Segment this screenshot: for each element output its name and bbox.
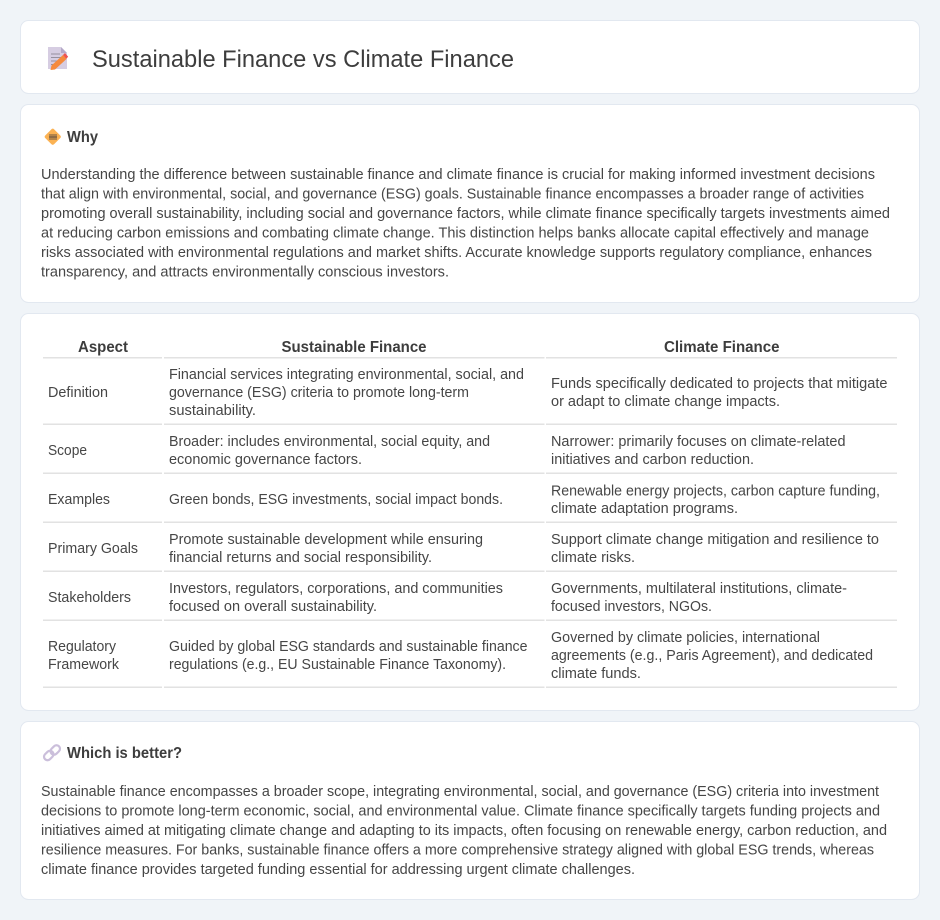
heading: why: Why (67, 129, 98, 146)
row: stakeholders: focused investors, NGOs. (551, 599, 712, 615)
title: Sustainable Finance vs Climate Finance (92, 46, 514, 73)
row: regulatory framework (48, 630, 873, 682)
row: regulatory framework: agreements (e.g., Paris Agreement), and dedicated (551, 648, 873, 664)
text block: which is better paragraph: decisions to promote long-term economic, social, and environmental value. Climate finance specifically targets funding projects and (41, 804, 880, 820)
row: regulatory framework: Guided by global ESG standards and sustainable finance (169, 639, 528, 655)
table header row: Sustainable Finance (282, 339, 427, 356)
text block: why paragraph: at reducing carbon emissions and combating climate change. This distinction helps banks allocate capital effectively and manage (41, 226, 869, 242)
row: definition (48, 367, 888, 419)
row: examples: Examples (48, 492, 110, 508)
row: scope: initiatives and carbon reduction. (551, 452, 754, 468)
row: definition: Definition (48, 385, 108, 401)
text block: which is better paragraph (41, 784, 887, 878)
row: definition: governance (ESG) criteria to promote long-term (169, 385, 469, 401)
row: scope (48, 434, 846, 468)
heading: which is better: Which is better? (67, 745, 182, 762)
row: definition: Funds specifically dedicated to projects that mitigate (551, 376, 888, 392)
text block: why paragraph (41, 167, 890, 280)
row: scope: Scope (48, 443, 87, 459)
row: regulatory framework: Governed by climate policies, international (551, 630, 820, 646)
table header row: Climate Finance (664, 339, 780, 356)
row: definition: or adapt to climate change impacts. (551, 394, 780, 410)
row: stakeholders: Stakeholders (48, 590, 131, 606)
panel: header (20, 20, 920, 94)
table header row: Aspect (78, 339, 129, 356)
row: regulatory framework: climate funds. (551, 666, 641, 682)
row: scope: Narrower: primarily focuses on climate-related (551, 434, 846, 450)
row: examples: Renewable energy projects, carbon capture funding, (551, 484, 880, 500)
row: primary goals: Promote sustainable development while ensuring (169, 532, 483, 548)
icon: orange warning diamond (44, 128, 62, 146)
text block: which is better paragraph: Sustainable finance encompasses a broader scope, integrating environmental, social, and governance (ESG) criteria into investment (41, 784, 879, 800)
row: primary goals: financial returns and social responsibility. (169, 550, 432, 566)
text block: which is better paragraph: resilience measures. For banks, sustainable finance offers a more comprehensive strategy aligned with global ESG trends, whereas (41, 842, 874, 858)
row: primary goals: climate risks. (551, 550, 635, 566)
row: examples: climate adaptation programs. (551, 501, 738, 517)
row: examples: Green bonds, ESG investments, social impact bonds. (169, 492, 503, 508)
row: definition: Financial services integrating environmental, social, and (169, 367, 524, 383)
table header row (78, 339, 780, 356)
panel: comparison table (20, 314, 920, 710)
icon: document with pencil (48, 47, 68, 70)
row: scope: economic governance factors. (169, 452, 362, 468)
text block: which is better paragraph: initiatives aimed at mitigating climate change and adapting to its impacts, often focusing on renewable energy, carbon reduction, and (41, 823, 887, 839)
text block: why paragraph: that align with environmental, social, and governance (ESG) goals. Sustainable finance encompasses a broader range of activities (41, 186, 864, 202)
row: regulatory framework: Regulatory (48, 639, 117, 655)
row: stakeholders: focused on overall sustainability. (169, 599, 377, 615)
text block: why paragraph: risks associated with environmental regulations and market shifts. Accurate knowledge supports regulatory compliance, enhances (41, 245, 872, 261)
row: regulatory framework: regulations (e.g., EU Sustainable Finance Taxonomy). (169, 657, 506, 673)
panel: why (20, 104, 920, 302)
row: examples (48, 484, 880, 517)
row: regulatory framework: Framework (48, 657, 120, 673)
icon: link (43, 744, 61, 762)
row: stakeholders (48, 581, 847, 615)
row: definition: sustainability. (169, 403, 256, 419)
row: scope: Broader: includes environmental, social equity, and (169, 434, 490, 450)
panel: which is better (20, 722, 920, 900)
row: stakeholders: Investors, regulators, corporations, and communities (169, 581, 503, 597)
row: primary goals (48, 532, 879, 566)
text block: why paragraph: Understanding the difference between sustainable finance and climate finance is crucial for making informed investment decisions (41, 167, 875, 183)
text block: why paragraph: promoting overall sustainability, including social and governance factors, while climate finance specifically targets investments aimed (41, 206, 890, 222)
row: primary goals: Primary Goals (48, 541, 138, 557)
text block: which is better paragraph: climate finance provides targeted funding essential for addressing urgent climate challenges. (41, 862, 635, 878)
row: stakeholders: Governments, multilateral institutions, climate- (551, 581, 847, 597)
text block: why paragraph: transparency, and attracts environmentally conscious investors. (41, 264, 449, 280)
row: primary goals: Support climate change mitigation and resilience to (551, 532, 879, 548)
